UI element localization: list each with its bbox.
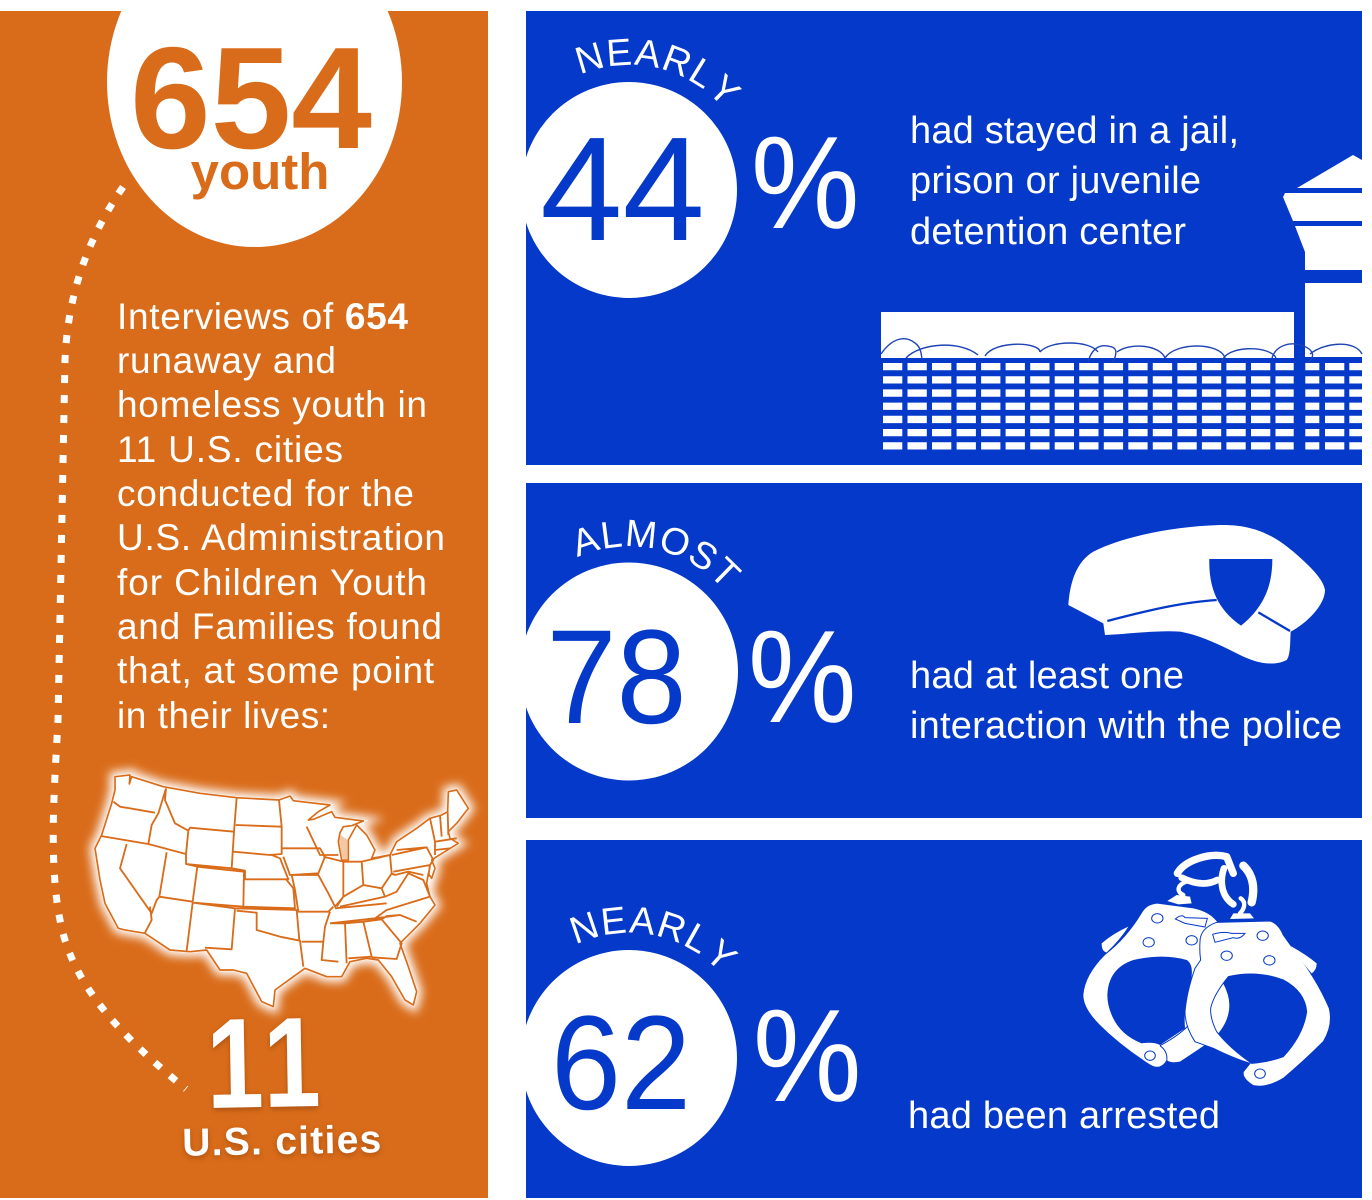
icon: US map xyxy=(95,775,468,1007)
description text: for Children Youth xyxy=(117,562,427,603)
icon: handcuffs xyxy=(1083,855,1330,1086)
percent sign: % xyxy=(753,982,861,1129)
white circle with 44 xyxy=(521,82,737,298)
label U.S. cities: U.S. cities xyxy=(182,1120,382,1167)
white circle with 78 xyxy=(520,562,738,780)
police description xyxy=(910,655,1342,747)
panel: 78 percent police xyxy=(526,483,1362,818)
description text: Interviews of 654 xyxy=(117,296,408,337)
dotted connector line xyxy=(53,187,186,1089)
percent sign: % xyxy=(748,603,856,750)
description text: homeless youth in xyxy=(117,384,427,425)
panel: left orange column xyxy=(0,0,488,1198)
description text: conducted for the xyxy=(117,473,414,514)
police description: had at least one xyxy=(910,655,1184,697)
description text: U.S. Administration xyxy=(117,517,445,558)
label youth: youth xyxy=(191,143,329,200)
number 11: 11 xyxy=(205,992,327,1138)
jail description: prison or juvenile xyxy=(910,160,1201,202)
percent sign: % xyxy=(751,109,859,256)
description text xyxy=(117,296,445,736)
arrested description: had been arrested xyxy=(908,1095,1220,1137)
circle: 654 youth xyxy=(107,0,402,247)
icon: jail wall and tower xyxy=(881,155,1362,450)
description text: in their lives: xyxy=(117,695,330,736)
description text: and Families found xyxy=(117,606,442,647)
curved label almost: ALMOST xyxy=(577,520,742,584)
curved label nearly: NEARLY xyxy=(570,906,739,966)
number 11: 11 xyxy=(205,990,327,1136)
number 62: 62 xyxy=(551,987,691,1138)
big number 654: 654 xyxy=(130,17,372,179)
jail description: detention center xyxy=(910,211,1186,253)
description text: that, at some point xyxy=(117,650,435,691)
jail description xyxy=(910,110,1239,253)
curved label nearly: NEARLY xyxy=(576,38,742,101)
description text: 11 U.S. cities xyxy=(117,429,343,470)
number 78: 78 xyxy=(546,601,687,752)
label U.S. cities: U.S. cities xyxy=(182,1118,382,1165)
icon: police cap xyxy=(1068,525,1325,664)
panel: 44 percent jail xyxy=(526,11,1363,465)
number 44: 44 xyxy=(540,107,705,272)
police description: interaction with the police xyxy=(910,705,1342,747)
panel: 62 percent arrested xyxy=(526,840,1362,1198)
description text: runaway and xyxy=(117,340,336,381)
jail description: had stayed in a jail, xyxy=(910,110,1239,152)
white circle with 62 xyxy=(521,950,737,1166)
